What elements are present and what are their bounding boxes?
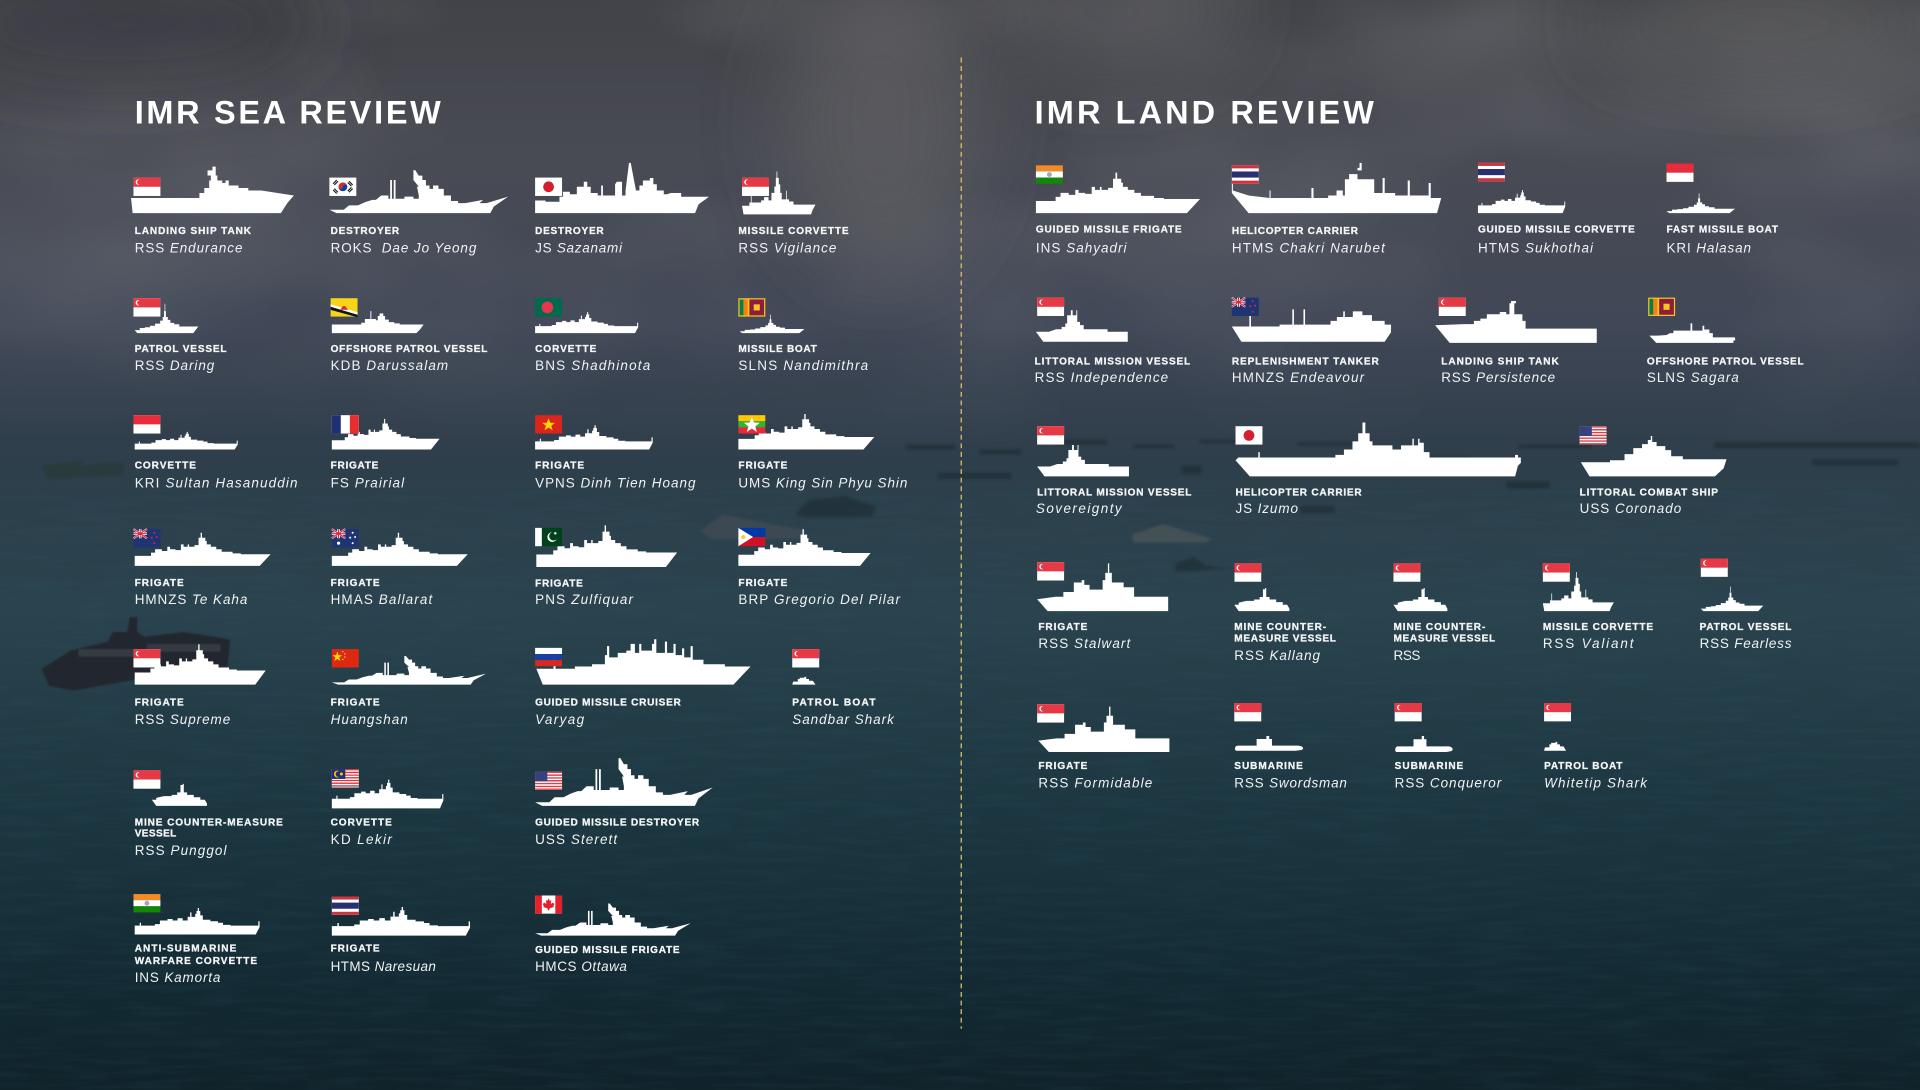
ship: RSS Kallang: MINE COUNTER- [1234,622,1326,633]
ship: BRP Gregorio Del Pilar [738,528,900,607]
ship: KD Lekir: CORVETTE [331,817,392,828]
ship: HTMS Sukhothai: HTMS Sukhothai [1478,240,1594,255]
ship: RSS Fearless: RSS Fearless [1700,636,1792,651]
ship: RSS Stalwart: RSS Stalwart [1038,636,1131,651]
ship: Sandbar Shark: PATROL BOAT [792,697,876,708]
ship: RSS Persistence: LANDING SHIP TANK [1441,356,1560,367]
panel: land review fleet [1035,163,1804,790]
ship: PNS Zulfiquar [535,525,677,607]
ship: RSS Formidable: RSS Formidable [1038,775,1152,790]
ship: HMAS Ballarat: FRIGATE [331,578,380,589]
ship: RSS Punggol: VESSEL [135,828,176,839]
ship: SLNS Nandimithra: SLNS Nandimithra [738,358,869,373]
ship: KDB Darussalam [331,298,487,373]
ship: HMNZS Endeavour: REPLENISHMENT TANKER [1232,356,1380,367]
ship: RSS Punggol [133,770,283,858]
ship: RSS Swordsman: SUBMARINE [1234,761,1303,772]
divider [960,58,962,1029]
ship: BNS Shadhinota: CORVETTE [535,344,597,355]
ship: INS Sahyadri [1036,165,1200,255]
ship: KRI Sultan Hasanuddin: CORVETTE [135,460,196,471]
ship: HTMS Naresuan: HTMS Naresuan [331,959,436,974]
ship: HMNZS Te Kaha [133,529,271,607]
ship: INS Kamorta: INS Kamorta [135,970,221,985]
ship: Sandbar Shark [792,649,895,727]
ship: KRI Halasan: KRI Halasan [1667,240,1751,255]
ship: Varyag: Varyag [535,712,585,727]
ship: HMCS Ottawa: HMCS Ottawa [535,959,627,974]
ship: RSS Independence: RSS Independence [1035,370,1168,385]
ship: RSS Conqueror: RSS Conqueror [1395,775,1502,790]
ship: RSS Swordsman [1234,703,1347,790]
ship: HMNZS Te Kaha: HMNZS Te Kaha [135,592,248,607]
ship: RSS (unnamed mine counter-measure vessel): MINE COUNTER- [1393,622,1485,633]
ship: Huangshan: FRIGATE [331,697,380,708]
ship: RSS Valiant: MISSILE CORVETTE [1543,622,1653,633]
ship: Sovereignty: LITTORAL MISSION VESSEL [1037,487,1191,498]
ship: RSS (unnamed mine counter-measure vessel): MEASURE VESSEL [1393,634,1495,645]
ship: JS Izumo [1236,423,1521,516]
ship: Varyag [535,639,751,727]
ship: RSS Endurance: RSS Endurance [135,240,242,255]
ship: BNS Shadhinota: BNS Shadhinota [535,358,651,373]
ship: ROKS Dae Jo Yeong: ROKS Dae Jo Yeong [331,240,477,255]
ship: USS Sterett [535,758,713,847]
ship: Sovereignty: Sovereignty [1036,501,1123,516]
ship: RSS Formidable: FRIGATE [1038,761,1088,772]
ship: JS Sazanami: JS Sazanami [535,240,623,255]
ship: HTMS Sukhothai [1478,163,1635,255]
ship: HMNZS Te Kaha: FRIGATE [135,578,184,589]
ship: HTMS Chakri Narubet [1232,163,1441,255]
ship: PNS Zulfiquar: PNS Zulfiquar [535,592,634,607]
dark moored ship in the foreground [42,617,230,691]
ship: RSS Supreme: RSS Supreme [135,712,230,727]
ship: KRI Sultan Hasanuddin [133,415,298,490]
ship: RSS Daring [133,298,227,373]
ship: RSS Daring: RSS Daring [135,358,215,373]
ship: RSS Stalwart: FRIGATE [1038,622,1088,633]
ship: RSS Stalwart [1037,562,1168,651]
ship: PNS Zulfiquar: FRIGATE [535,579,583,590]
ship: HTMS Naresuan: FRIGATE [331,944,380,955]
ship: Whitetip Shark [1544,703,1648,790]
ship: RSS Conqueror [1395,703,1502,790]
ship: RSS Valiant: RSS Valiant [1543,636,1635,651]
ship: HMCS Ottawa: GUIDED MISSILE FRIGATE [535,945,680,956]
ship: RSS Vigilance: RSS Vigilance [738,240,836,255]
ship: USS Coronado: USS Coronado [1580,501,1682,516]
ship: USS Coronado [1580,426,1727,516]
ship: Huangshan [331,649,486,727]
ship: BRP Gregorio Del Pilar: FRIGATE [738,578,788,589]
title: IMR Sea Review: IMR SEA REVIEW [135,95,441,131]
ship: HMAS Ballarat [331,529,468,607]
ship: SLNS Nandimithra [738,298,869,373]
ship: USS Coronado: LITTORAL COMBAT SHIP [1580,487,1718,498]
ship: Whitetip Shark: Whitetip Shark [1544,775,1648,790]
ship: RSS Punggol: RSS Punggol [135,843,228,858]
ship: RSS Vigilance [738,171,849,255]
ship: SLNS Sagara: SLNS Sagara [1647,370,1739,385]
ship: Whitetip Shark: PATROL BOAT [1544,761,1623,772]
ship: Sovereignty [1036,426,1191,516]
ship: ROKS Dae Jo Yeong [329,170,508,255]
ship: RSS Endurance: LANDING SHIP TANK [135,226,252,237]
ship: JS Sazanami [535,163,709,255]
ship: USS Sterett: USS Sterett [535,832,618,847]
ship: INS Kamorta [133,894,260,985]
ship: FS Prairial [331,415,440,490]
ship: UMS King Sin Phyu Shin: UMS King Sin Phyu Shin [738,475,907,490]
ship: RSS Kallang: MEASURE VESSEL [1234,634,1336,645]
ship: Sandbar Shark: Sandbar Shark [792,712,895,727]
title: IMR Land Review: IMR LAND REVIEW [1035,95,1374,131]
ship: INS Kamorta: ANTI-SUBMARINE [135,944,237,955]
ship: RSS Independence: LITTORAL MISSION VESSEL [1035,356,1190,367]
ship: RSS (unnamed mine counter-measure vessel): RSS [1393,648,1420,663]
ship: VPNS Dinh Tien Hoang: VPNS Dinh Tien Hoang [535,475,696,490]
ship: SLNS Nandimithra: MISSILE BOAT [738,344,818,355]
ship: RSS Daring: PATROL VESSEL [135,344,227,355]
ship: KD Lekir [331,769,443,847]
ship: HTMS Naresuan [331,896,470,974]
ship: HTMS Sukhothai: GUIDED MISSILE CORVETTE [1478,225,1635,236]
ship: RSS Vigilance: MISSILE CORVETTE [738,226,849,237]
ship: HMAS Ballarat: HMAS Ballarat [331,592,433,607]
ship: RSS Formidable [1037,704,1169,790]
ship: UMS King Sin Phyu Shin: FRIGATE [738,460,788,471]
ship: RSS Supreme: FRIGATE [135,697,184,708]
panel: sea review fleet [131,163,907,985]
ship: KD Lekir: KD Lekir [331,832,392,847]
ship: JS Sazanami: DESTROYER [535,226,604,237]
ship: HMNZS Endeavour [1232,298,1391,385]
ship: VPNS Dinh Tien Hoang: FRIGATE [535,460,584,471]
ship: KDB Darussalam: OFFSHORE PATROL VESSEL [331,344,487,355]
ship: RSS Supreme [133,644,266,727]
ship: SLNS Sagara [1647,298,1804,385]
ship: INS Sahyadri: INS Sahyadri [1036,240,1128,255]
ship: RSS Kallang: RSS Kallang [1234,648,1320,663]
ship: KRI Halasan: FAST MISSILE BOAT [1667,225,1779,236]
ship: INS Sahyadri: GUIDED MISSILE FRIGATE [1036,225,1182,236]
ship: RSS Fearless [1700,558,1792,651]
ship: UMS King Sin Phyu Shin [738,414,907,490]
ship: RSS Independence [1035,298,1190,385]
ship: JS Izumo: HELICOPTER CARRIER [1236,487,1362,498]
ship: ROKS Dae Jo Yeong: DESTROYER [331,226,400,237]
ship: RSS Punggol: MINE COUNTER-MEASURE [135,817,283,828]
ship: SLNS Sagara: OFFSHORE PATROL VESSEL [1647,356,1804,367]
ship: USS Sterett: GUIDED MISSILE DESTROYER [535,817,700,828]
ship: KRI Halasan [1667,164,1779,255]
ship: JS Izumo: JS Izumo [1236,501,1298,516]
ship: Huangshan: Huangshan [331,712,408,727]
ship: FS Prairial: FS Prairial [331,475,405,490]
ship: RSS Persistence [1435,298,1597,385]
ship: HMCS Ottawa [535,895,691,974]
ship: RSS Kallang [1234,563,1336,663]
ship: RSS Persistence: RSS Persistence [1441,370,1555,385]
ship: HTMS Chakri Narubet: HTMS Chakri Narubet [1232,240,1386,255]
ship: KRI Sultan Hasanuddin: KRI Sultan Hasanuddin [135,475,298,490]
ship: KDB Darussalam: KDB Darussalam [331,358,448,373]
ship: HTMS Chakri Narubet: HELICOPTER CARRIER [1232,226,1359,237]
ship: HMNZS Endeavour: HMNZS Endeavour [1232,370,1365,385]
ship: FS Prairial: FRIGATE [331,460,379,471]
ship: RSS Conqueror: SUBMARINE [1395,761,1464,772]
ship: Varyag: GUIDED MISSILE CRUISER [535,697,682,708]
ship: RSS Endurance [131,167,294,255]
ship: VPNS Dinh Tien Hoang [535,415,696,490]
ship: RSS (unnamed mine counter-measure vessel) [1393,563,1495,663]
ship: BNS Shadhinota [535,298,651,373]
ship: RSS Valiant [1543,563,1653,651]
ship: INS Kamorta: WARFARE CORVETTE [135,956,257,967]
ship: BRP Gregorio Del Pilar: BRP Gregorio Del Pilar [738,592,900,607]
ship: RSS Swordsman: RSS Swordsman [1234,775,1347,790]
ship: RSS Fearless: PATROL VESSEL [1700,622,1791,633]
